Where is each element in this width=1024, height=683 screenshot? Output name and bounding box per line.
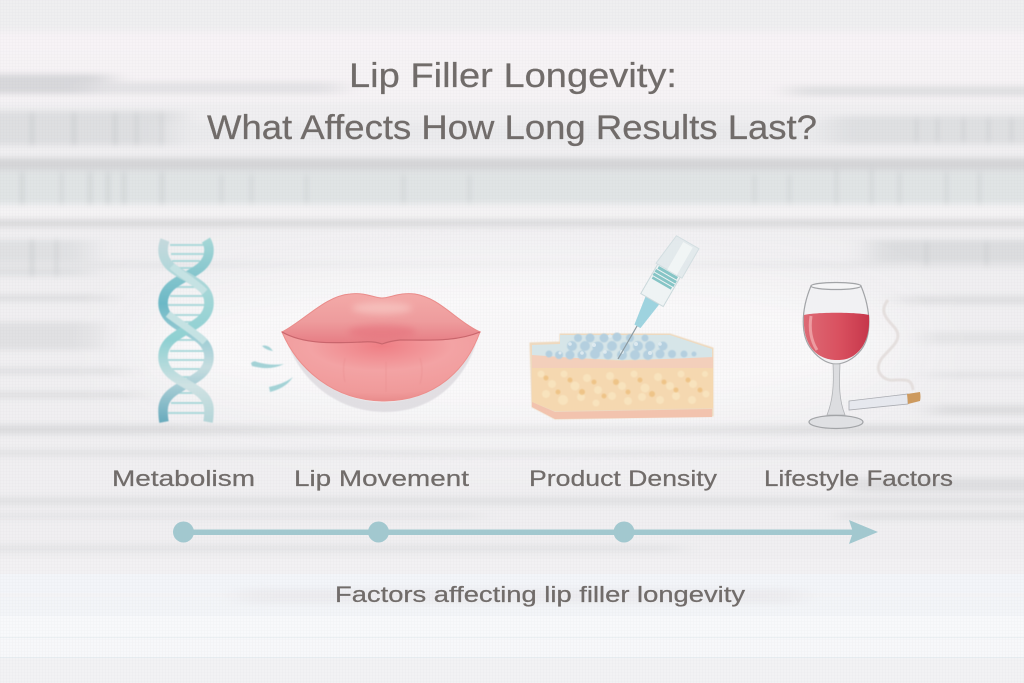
wine: [804, 313, 869, 360]
title: What Affects How Long Results Last?: [207, 109, 817, 147]
factor labels: Product Density: [529, 466, 717, 491]
needle hub: [630, 293, 662, 331]
gel beads: [546, 332, 696, 360]
node 2: [368, 522, 389, 542]
factor labels: Lip Movement: [294, 466, 469, 491]
icon: wine glass and cigarette: [803, 282, 920, 428]
centre glow: [130, 260, 910, 430]
title: Lip Filler Longevity:: [349, 57, 677, 95]
factor labels: Lifestyle Factors: [764, 466, 953, 491]
lower lip: [282, 332, 480, 401]
wine glass: [803, 282, 869, 428]
caption: Factors affecting lip filler longevity: [335, 582, 745, 607]
syringe upper chamber: [656, 234, 699, 278]
teal collar: [651, 266, 679, 290]
smoke: [878, 300, 913, 390]
icon: syringe and skin cross-section: [530, 234, 713, 419]
needle: [618, 323, 639, 359]
strand A: [163, 240, 209, 422]
strand A front crossing: [168, 266, 205, 342]
upper lip: [282, 294, 480, 344]
node 1: [173, 522, 194, 542]
factor labels: Metabolism: [112, 466, 255, 491]
DNA rungs: [168, 245, 206, 413]
lip shadow: [287, 340, 477, 412]
factor labels: [112, 466, 953, 491]
stem: [827, 364, 845, 415]
fat cells: [538, 370, 710, 406]
icon: DNA helix: [163, 240, 209, 422]
title: [207, 57, 817, 147]
cigarette: [849, 392, 920, 410]
timeline arrow: [173, 520, 878, 544]
syringe: [605, 234, 699, 366]
foot: [809, 416, 863, 428]
gel layer: [532, 335, 712, 360]
skin block: [530, 332, 713, 419]
icon: motion marks: [251, 346, 293, 392]
node 3: [614, 522, 634, 542]
fat layer: [532, 368, 713, 411]
strand B: [163, 240, 209, 422]
syringe barrel: [641, 264, 680, 307]
icon: lips: [282, 294, 480, 412]
